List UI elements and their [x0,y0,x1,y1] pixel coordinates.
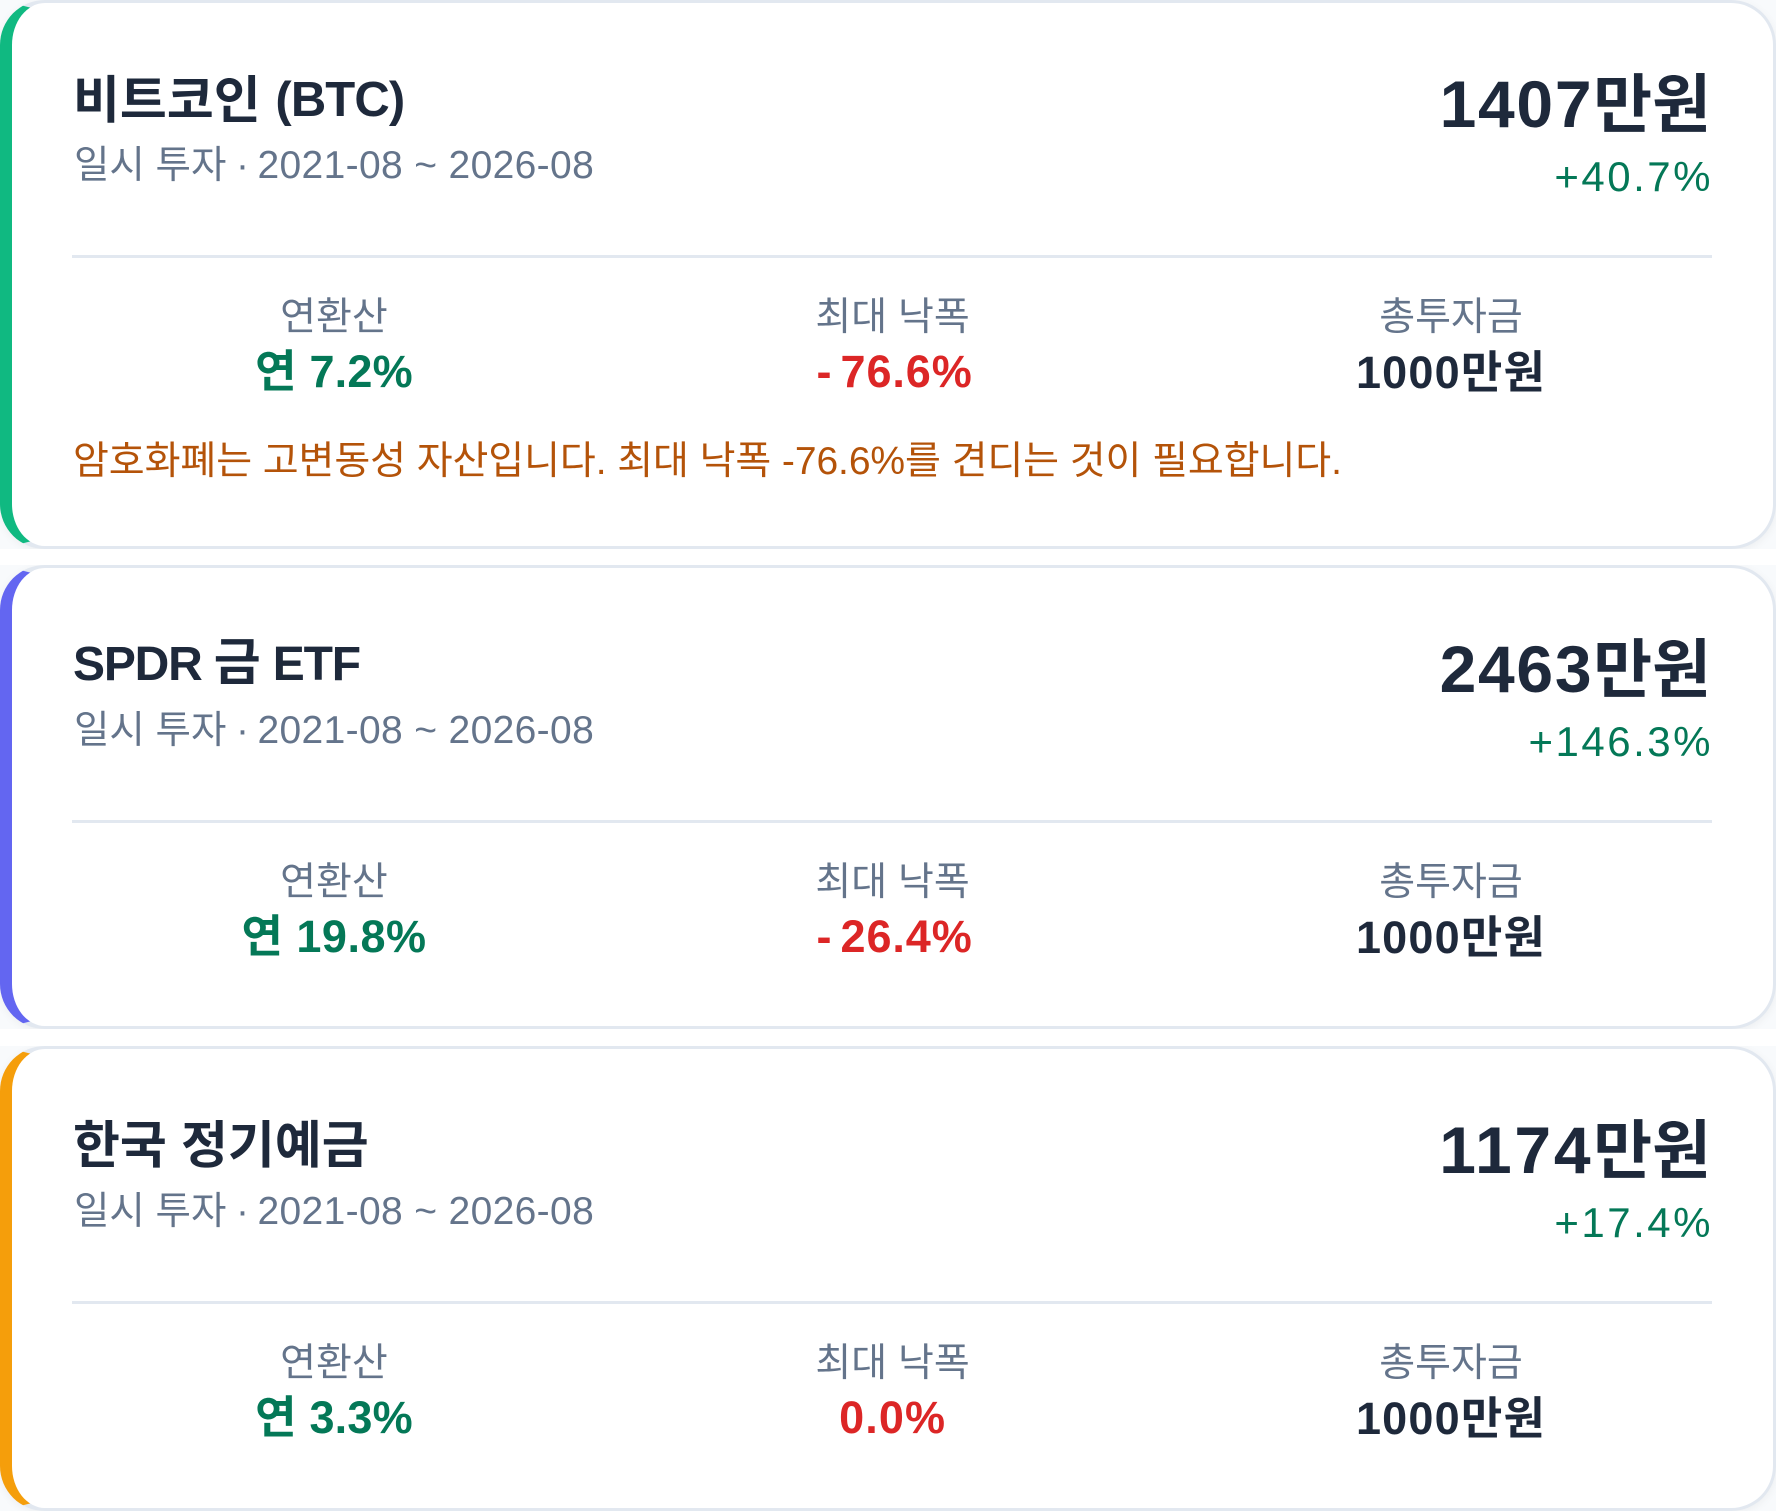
metric: max drawdown [815,861,973,962]
warning note: 암호화폐는 고변동성 자산입니다. 최대 낙폭 -76.6%를 견디는 것이 필요합니다. [73,440,1342,483]
metric: max drawdown: 최대 낙폭 [815,1342,970,1385]
metric: max drawdown [815,1342,970,1443]
metric: annualized return: 연 3.3% [255,1392,413,1443]
asset name: 한국 정기예금 [73,1117,369,1174]
asset name: SPDR 금 ETF [73,634,360,691]
metric: max drawdown: -76.6% [817,346,973,397]
panel: Korean term deposit card [0,1046,1776,1511]
metric: annualized return [242,861,426,962]
panel: Bitcoin card [0,0,1776,549]
investment type and period: 일시 투자 · 2021-08 ~ 2026-08 [74,708,594,752]
metric: annualized return: 연 7.2% [255,346,413,397]
asset name: 비트코인 (BTC) [73,72,404,129]
metric: annualized return: 연환산 [280,861,388,904]
total return: +17.4% [1554,1199,1713,1246]
metric: total invested: 1000만원 [1356,1393,1546,1444]
final value: 2463만원 [1440,632,1711,706]
metric: annualized return: 연환산 [280,1342,388,1385]
total return: +40.7% [1554,153,1713,200]
metric: total invested: 총투자금 [1379,861,1523,904]
metric: total invested [1356,1342,1546,1444]
metric: total invested: 총투자금 [1379,1342,1523,1385]
metric: annualized return [255,1342,413,1443]
metric: max drawdown [815,296,973,397]
final value: 1174만원 [1439,1113,1711,1187]
metric: max drawdown: 최대 낙폭 [815,296,970,339]
metric: max drawdown: 최대 낙폭 [815,861,970,904]
total return: +146.3% [1529,718,1713,765]
metric: total invested: 1000만원 [1356,912,1546,963]
metric: max drawdown: -26.4% [817,911,973,962]
metric: total invested: 총투자금 [1379,296,1523,339]
metric: annualized return [255,296,413,397]
metric: max drawdown: 0.0% [839,1392,946,1443]
investment type and period: 일시 투자 · 2021-08 ~ 2026-08 [74,144,594,186]
metric: total invested [1356,861,1546,963]
final value: 1407만원 [1440,67,1711,141]
metric: annualized return: 연 19.8% [242,911,426,962]
panel: SPDR gold ETF card [0,565,1776,1029]
investment type and period: 일시 투자 · 2021-08 ~ 2026-08 [74,1190,594,1232]
metric: total invested: 1000만원 [1356,347,1546,398]
metric: total invested [1356,296,1546,398]
metric: annualized return: 연환산 [280,296,388,339]
